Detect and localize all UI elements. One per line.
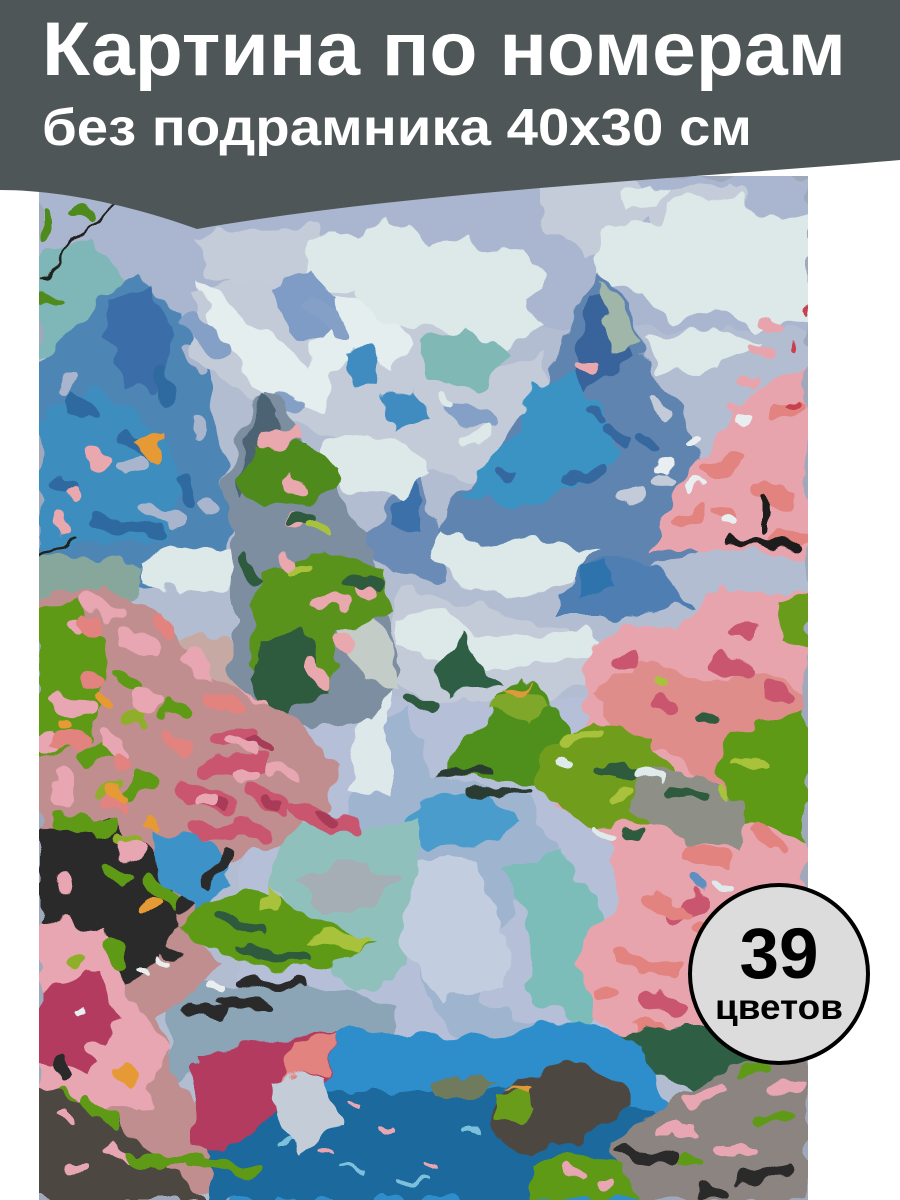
subtitle: без подрамника 40х30 см bbox=[42, 99, 752, 157]
right peak bbox=[430, 275, 725, 615]
upper right blossoms bbox=[650, 312, 808, 560]
painting: mountain lake with blossoms bbox=[39, 176, 808, 1200]
badge: 39 colours bbox=[690, 885, 868, 1063]
top-left branch bbox=[40, 208, 115, 555]
deep water bbox=[210, 1020, 690, 1200]
lake bbox=[170, 680, 630, 1080]
mist bbox=[178, 584, 600, 703]
left foliage bbox=[39, 585, 370, 1190]
central snowy mountains bbox=[190, 270, 550, 485]
rock pillar bbox=[227, 390, 402, 730]
title: Картина по номерам bbox=[42, 7, 846, 92]
rocks bbox=[39, 1050, 808, 1200]
badge: 39 colours: цветов bbox=[715, 988, 843, 1027]
left mountains bbox=[39, 240, 234, 600]
badge: 39 colours: 39 bbox=[740, 915, 818, 994]
lower clouds bbox=[140, 430, 600, 601]
clouds bbox=[301, 184, 808, 374]
far right islet bbox=[440, 680, 600, 794]
small peak bbox=[366, 477, 447, 586]
sky bbox=[39, 176, 808, 1200]
pink reflection bbox=[195, 1030, 340, 1155]
pillar foliage bbox=[235, 437, 430, 720]
right foliage bbox=[540, 590, 808, 1095]
header banner bbox=[0, 0, 900, 229]
